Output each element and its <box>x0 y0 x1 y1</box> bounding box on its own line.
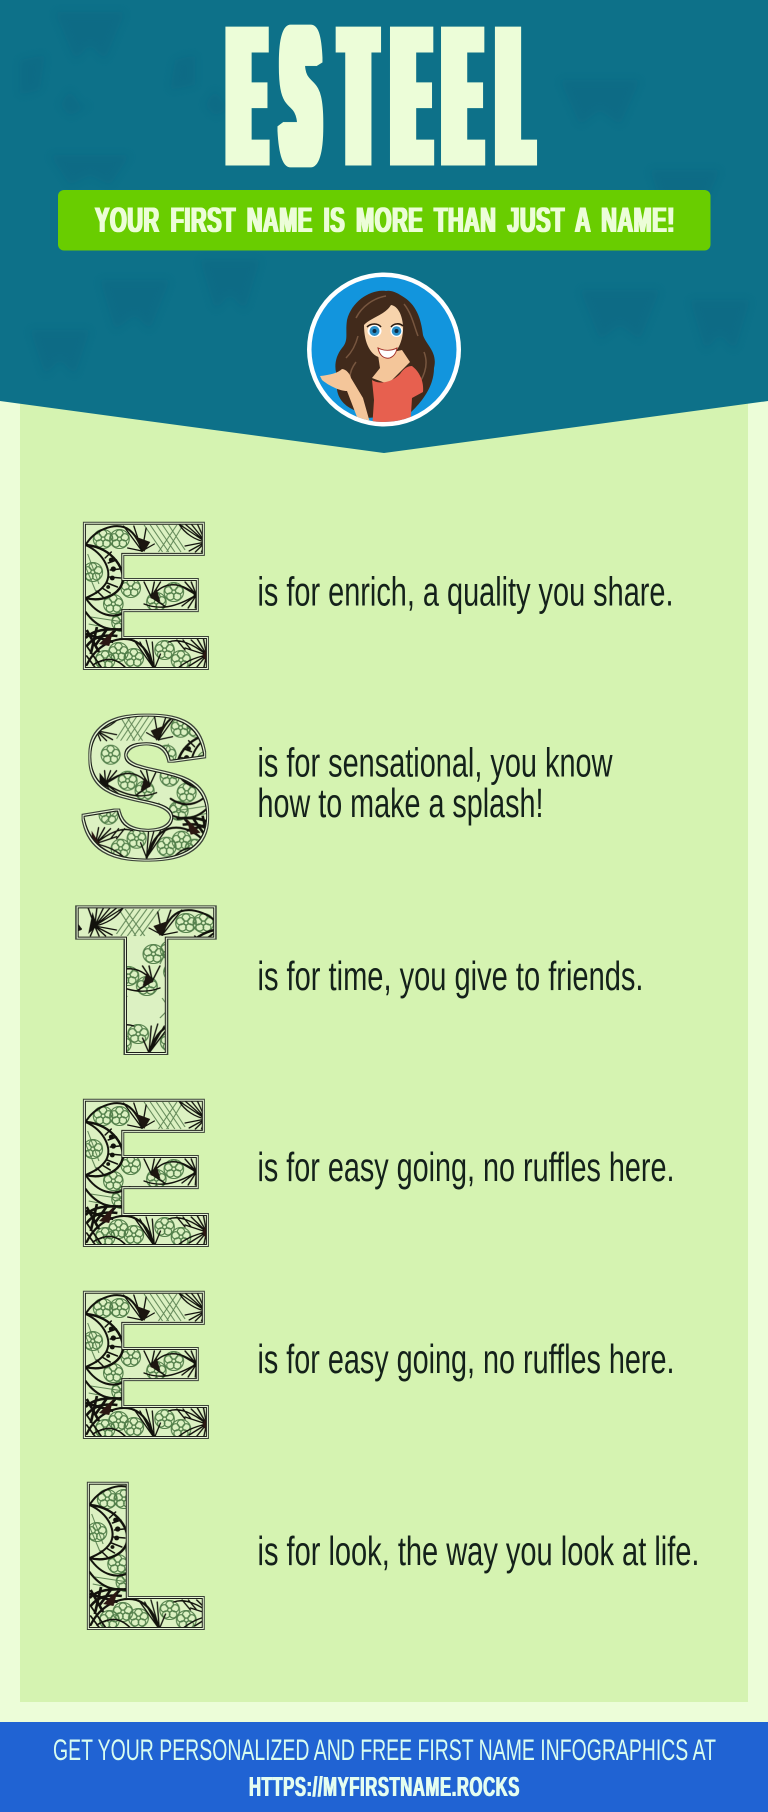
smile <box>378 348 397 358</box>
hair highlights <box>346 296 426 386</box>
text: sensational: how to make a splash! <box>258 780 544 826</box>
face <box>364 305 403 358</box>
header banner: teal chevron <box>0 0 768 453</box>
neck <box>372 350 410 384</box>
text: sensational <box>258 740 613 826</box>
text: sensational: is for sensational, you know <box>258 740 613 786</box>
arm and hand <box>320 369 370 420</box>
letter L: L <box>79 1445 205 1666</box>
footer url: HTTPS://MYFIRSTNAME.ROCKS <box>249 1771 520 1802</box>
row 1: letter E <box>75 486 673 706</box>
row 6: letter L <box>79 1445 699 1666</box>
content panel <box>20 380 748 1702</box>
subtitle banner <box>58 190 710 250</box>
row 4: letter E <box>75 1063 674 1283</box>
letter T: T <box>80 869 212 1092</box>
shirt <box>372 366 424 422</box>
letter E: E <box>75 1255 211 1475</box>
letter E: E <box>75 486 211 706</box>
row 5: letter E <box>75 1255 674 1475</box>
eyes <box>367 324 403 337</box>
letter S: S <box>83 680 211 895</box>
footer <box>0 1722 768 1812</box>
portrait: cartoon woman in circle <box>307 272 461 430</box>
hair <box>335 291 435 418</box>
row 3: letter T <box>80 869 644 1092</box>
letter E: E <box>75 1063 211 1283</box>
row 2: letter S <box>83 680 613 895</box>
